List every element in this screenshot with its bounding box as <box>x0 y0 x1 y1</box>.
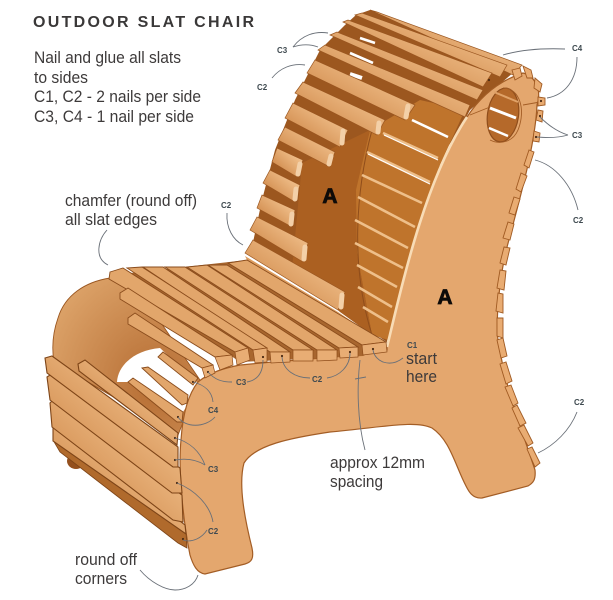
illustration: slat chair <box>45 10 545 574</box>
small slat labels: C3 <box>277 46 288 55</box>
small slat labels: C2 <box>573 216 584 225</box>
note: chamfer <box>65 192 197 229</box>
small slat labels: C2 <box>574 398 585 407</box>
text block: nailing instructions: Nail and glue all slats <box>34 49 181 67</box>
small slat labels: C2 <box>221 201 232 210</box>
front curve slats <box>45 356 187 548</box>
far side panel and arm <box>53 270 200 469</box>
seat slat front ends <box>202 342 387 378</box>
note: start here: here <box>406 368 437 386</box>
text block: nailing instructions: to sides <box>34 69 88 87</box>
note: spacing: approx 12mm <box>330 454 425 472</box>
note: spacing <box>330 454 425 491</box>
small slat labels: C3 <box>236 378 247 387</box>
interior slats seen through the back <box>350 38 448 322</box>
back slats <box>245 10 522 310</box>
text block: nailing instructions <box>34 49 201 126</box>
seat slats <box>109 256 387 422</box>
main side panel A <box>180 73 539 574</box>
small slat labels: C2 <box>312 375 323 384</box>
note: start here <box>406 350 437 386</box>
panel label A (side): A <box>437 286 453 309</box>
small slat labels <box>208 44 585 536</box>
note: round off corners <box>75 551 137 588</box>
back interior <box>252 10 522 345</box>
panel label A (back): A <box>322 185 338 208</box>
note: start here: start <box>406 350 437 368</box>
light slat ends <box>291 106 408 307</box>
text block: nailing instructions: C1, C2 - 2 nails per side <box>34 88 201 106</box>
small slat labels: C4 <box>572 44 583 53</box>
leader lines <box>99 33 578 590</box>
small slat labels: C1 <box>407 341 418 350</box>
text block: nailing instructions: C3, C4 - 1 nail per side <box>34 108 194 126</box>
note: round off corners: corners <box>75 570 127 588</box>
note: chamfer: all slat edges <box>65 211 157 229</box>
note: spacing: spacing <box>330 473 383 491</box>
small slat labels: C2 <box>257 83 268 92</box>
slat ends on the back edge <box>496 66 545 467</box>
small slat labels: C3 <box>572 131 583 140</box>
small slat labels: C4 <box>208 406 219 415</box>
note: round off corners: round off <box>75 551 137 569</box>
nail dots <box>174 79 542 540</box>
title: OUTDOOR SLAT CHAIR <box>33 14 254 31</box>
hand hole <box>470 86 540 144</box>
small slat labels: C3 <box>208 465 219 474</box>
note: chamfer: chamfer (round off) <box>65 192 197 210</box>
panel inner edge highlight <box>387 117 467 347</box>
small slat labels: C2 <box>208 527 219 536</box>
